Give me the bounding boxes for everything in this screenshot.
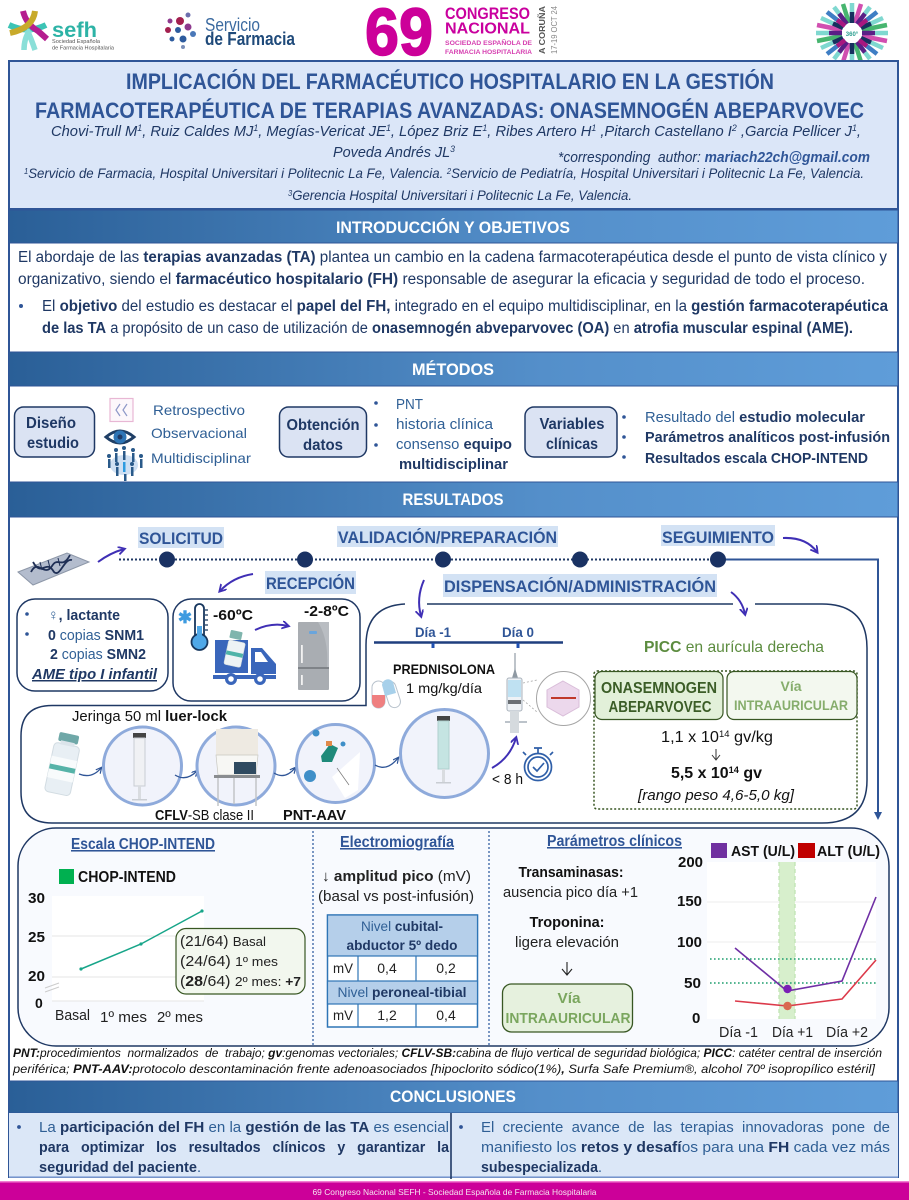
text: conclusión 2: El creciente avance de las terapias innovadoras pone de	[481, 1119, 890, 1136]
icon: vial	[44, 731, 82, 796]
table: amplitud	[328, 915, 478, 1027]
line chart: CHOP-INTEND: 30	[28, 890, 45, 907]
logo: SEFH	[9, 11, 115, 52]
text: conclusión 1: seguridad del paciente.	[39, 1159, 201, 1176]
heading: title	[35, 69, 864, 123]
panel: diseño estudio: Multidisciplinar	[151, 450, 251, 466]
authors: Poveda Andrés JL	[333, 144, 455, 161]
arrow: seguimiento	[783, 538, 817, 552]
affiliations: Servicio de Farmacia, Hospital Universitari i Politecnic La Fe, Valencia.	[28, 165, 447, 181]
authors: 1	[591, 123, 596, 133]
text: PICC: PICC en aurícula derecha	[644, 639, 824, 656]
arrow: recepción	[220, 574, 253, 591]
section header: Métodos	[9, 352, 898, 386]
line chart: CHOP-INTEND: 20	[28, 968, 45, 985]
heading: title: IMPLICACIÓN DEL FARMACÉUTICO HOSPITALARIO EN LA GESTIÓN	[126, 69, 774, 94]
affiliations: 3	[288, 189, 293, 198]
box: onasemnogen: ABEPARVOVEC	[608, 699, 712, 716]
panel: obtención datos: multidisciplinar	[399, 456, 508, 473]
logo: SEFH: Sociedad Española	[52, 39, 101, 45]
arrow: prep 3	[274, 768, 295, 776]
panel: dosis: 14	[719, 729, 730, 739]
label: DISPENSACIÓN/ADMINISTRACIÓN: DISPENSACIÓN/ADMINISTRACIÓN	[444, 577, 716, 596]
text: conclusión 2: subespecializada.	[481, 1159, 602, 1176]
section header: Conclusiones	[9, 1081, 898, 1113]
arrow: menos de 8 h	[492, 738, 516, 768]
footnote: abreviaturas	[12, 1046, 882, 1076]
panel: diseño estudio	[14, 398, 251, 481]
panel: parámetros clínicos: ausencia pico día +1	[503, 884, 638, 901]
label: CFLV-SB: CFLV-SB clase II	[155, 808, 254, 824]
authors: , Ribes Artero H	[487, 123, 591, 140]
table: amplitud: 0,4	[436, 1007, 456, 1023]
administration timeline	[374, 624, 563, 648]
panel: parámetros clínicos	[502, 833, 880, 1041]
panel: variables clínicas: Resultado del estudio molecular	[645, 409, 865, 426]
footnote: abreviaturas: periférica; PNT-AAV: protocolo descontaminación frente adenoasociados [hipoclorito sódico(1%) , Surfa Safe Premium®, alcohol 70º isopropílico estéril]	[12, 1062, 876, 1076]
line chart: transaminasas	[677, 854, 876, 1041]
table: amplitud: Nivel cubital-	[361, 918, 443, 934]
panel: diseño estudio: estudio	[27, 435, 79, 452]
section header: Métodos: MÉTODOS	[412, 360, 494, 379]
administration timeline: Día -1	[415, 624, 451, 640]
panel: parámetros clínicos: Transaminasas:	[518, 864, 624, 881]
icon: stopwatch	[523, 748, 553, 780]
box: vía intraauricular: INTRAAURICULAR	[734, 697, 848, 713]
line chart: CHOP-INTEND: 25	[28, 929, 45, 946]
line chart: CHOP-INTEND: 1º mes	[100, 1009, 147, 1026]
section header: Introducción: INTRODUCCIÓN Y OBJETIVOS	[336, 218, 570, 237]
panel: recepción: -2-8ºC	[304, 603, 349, 620]
panel: recepción: -60ºC	[213, 607, 253, 624]
logo: Servicio de Farmacia: Servicio	[205, 15, 260, 35]
panel: dosis	[594, 671, 857, 809]
callout: puntuaciones: (28/64) 2º mes: +7	[180, 973, 301, 990]
panel: dosis: gv	[739, 765, 762, 782]
panel: variables clínicas: clínicas	[546, 436, 598, 453]
panel: diseño estudio: Observacional	[151, 425, 247, 441]
panel: dosis: [rango peso 4,6-5,0 kg]	[637, 788, 795, 804]
icon: thermometer	[192, 604, 208, 650]
arrow: dispensación izquierda	[419, 580, 424, 616]
icon: DNA slide	[18, 553, 89, 585]
affiliations: Gerencia Hospital Universitari i Politecnic La Fe, Valencia.	[292, 187, 632, 203]
poster: < 8 h	[492, 772, 523, 788]
panel: preparación y administración outline	[21, 604, 867, 823]
icon: virus capsid zoom	[523, 672, 590, 726]
table: amplitud: 0,2	[436, 960, 456, 976]
table: amplitud: Nivel peroneal-tibial	[338, 984, 466, 1000]
panel: dosis: gv/kg	[730, 729, 773, 746]
panel: electromiografía: ↓ amplitud pico (mV)	[322, 868, 471, 885]
icon: people	[107, 446, 143, 481]
line chart: CHOP-INTEND	[28, 890, 204, 1026]
text: conclusión 2	[459, 1119, 890, 1176]
icon: snowflake: ✱	[178, 608, 192, 627]
footer bar	[0, 1181, 909, 1200]
authors: Chovi-Trull M	[51, 123, 139, 140]
timeline	[119, 552, 882, 820]
affiliations: Servicio de Pediatría, Hospital Universitari i Politecnic La Fe, Valencia.	[451, 165, 864, 181]
arrow: prep 2	[175, 771, 197, 778]
logo: 69 Congreso Nacional: NACIONAL	[445, 20, 530, 38]
authors: , López Briz E	[391, 123, 483, 140]
panel: paciente	[17, 599, 168, 691]
section header: Introducción	[9, 210, 898, 243]
step: jeringa cargada	[400, 710, 488, 798]
panel: obtención datos	[280, 396, 512, 473]
legend: AST ALT: ALT (U/L)	[817, 843, 880, 860]
line chart: transaminasas: 150	[677, 893, 702, 910]
panel: recepción	[173, 599, 360, 701]
step: descontaminación PNT-AAV	[296, 724, 374, 802]
line chart: transaminasas: Día +2	[826, 1024, 868, 1041]
logo: Servicio de Farmacia	[165, 12, 296, 49]
authors: 1	[137, 123, 142, 133]
panel: parámetros clínicos: Parámetros clínicos	[547, 833, 682, 850]
icon: eye	[106, 430, 134, 444]
authors: 1	[253, 123, 258, 133]
panel: diseño estudio: Retrospectivo	[153, 402, 245, 418]
text: introducción: El abordaje de las terapias avanzadas (TA) plantea un cambio en la cadena farmacoterapéutica desde el punto de vista clínico y	[18, 249, 887, 266]
text: introducción: de las TA a propósito de un caso de utilización de onasemnogén abveparvovec (OA) en atrofia muscular espinal (AME).	[42, 320, 853, 337]
text: introducción: El objetivo del estudio es destacar el papel del FH, integrado en el equipo multidisciplinar, en la gestión farmacoterapéutica	[42, 298, 888, 315]
authors	[51, 123, 870, 166]
panel: parámetros clínicos: Troponina:	[530, 914, 604, 931]
box: vía intraauricular: Vía	[558, 990, 581, 1007]
section header: Conclusiones: CONCLUSIONES	[390, 1087, 516, 1106]
table: amplitud: abductor 5º dedo	[346, 937, 458, 953]
step: cabina CFLV	[197, 727, 275, 806]
text: Jeringa: Jeringa 50 ml luer-lock	[72, 709, 228, 725]
text: conclusión 2: manifiesto los retos y desafí os para una FH cada vez más	[481, 1139, 890, 1156]
panel: variables clínicas: Parámetros analíticos post-infusión	[645, 429, 890, 446]
panel: diseño estudio: Diseño	[26, 415, 76, 432]
panel: dosis: 1,1 x 10	[661, 729, 716, 746]
line chart: CHOP-INTEND: 0	[35, 995, 43, 1011]
text: prednisolona: 1 mg/kg/día	[406, 680, 482, 696]
label: SEGUIMIENTO: SEGUIMIENTO	[662, 529, 774, 547]
authors: 1	[386, 123, 391, 133]
authors: ,Pitarch Castellano I	[596, 123, 732, 140]
section header: Resultados	[9, 482, 898, 517]
box: vía intraauricular: Vía	[780, 678, 802, 694]
panel: variables clínicas: Resultados escala CHOP-INTEND	[645, 450, 868, 467]
icon: pills	[372, 679, 402, 709]
text: introducción	[18, 249, 888, 337]
icon: truck	[213, 630, 276, 685]
panel: electromiografía: (basal vs post-infusión)	[318, 888, 474, 905]
arrow: prep 4	[375, 758, 398, 767]
panel: obtención datos: datos	[303, 437, 343, 454]
line chart: transaminasas: 100	[677, 934, 702, 951]
logo: radial burst 360	[816, 3, 888, 62]
footnote: abreviaturas: PNT:procedimientos normalizados de trabajo; gv:genomas vectoriales; CFLV-SB:cabina de flujo vertical de seguridad biológica; PICC: catéter central de inserción	[13, 1046, 882, 1060]
authors: ,	[857, 123, 861, 140]
panel: conclusiones	[9, 1113, 898, 1179]
text: prednisolona	[393, 661, 495, 696]
callout: puntuaciones: (21/64) Basal	[180, 933, 266, 950]
authors: , Ruiz Caldes MJ	[142, 123, 254, 140]
logo: SEFH: sefh	[52, 19, 97, 42]
affiliations: 2	[446, 167, 452, 176]
logo: 69 Congreso Nacional: CONGRESO	[445, 4, 530, 23]
text: conclusión 1: La participación del FH en la gestión de las TA es esencial	[39, 1119, 449, 1136]
panel: obtención datos: Obtención	[286, 417, 360, 434]
panel: obtención datos: historia clínica	[396, 416, 494, 433]
line chart: transaminasas: 0	[692, 1010, 700, 1027]
logo: 69 Congreso Nacional: FARMACIA HOSPITALARIA	[445, 49, 532, 56]
box: vía intraauricular	[727, 672, 857, 720]
panel: paciente: AME tipo I infantil	[31, 666, 158, 683]
table: amplitud: mV	[333, 1007, 354, 1023]
panel: CHOP-INTEND	[28, 836, 305, 1026]
arrow: to solicitud	[98, 549, 124, 562]
legend: AST ALT	[711, 843, 880, 860]
text: prednisolona: PREDNISOLONA	[393, 661, 495, 677]
table: amplitud: 0,4	[377, 960, 397, 976]
logo: 69 Congreso Nacional: A CORUÑA	[537, 6, 547, 54]
logo: Servicio de Farmacia: de Farmacia	[205, 29, 296, 49]
text: introducción: organizativo, siendo el farmacéutico hospitalario (FH) responsable de asegurar la eficacia y seguridad de todo el proceso.	[18, 271, 865, 288]
affiliations	[24, 165, 864, 203]
panel: parámetros clínicos: ligera elevación	[515, 934, 619, 951]
icon: syringe	[505, 653, 527, 733]
authors: ,Garcia Pellicer J	[737, 123, 852, 140]
legend: AST ALT: AST (U/L)	[731, 843, 795, 860]
label: PNT-AAV: PNT-AAV	[283, 808, 346, 824]
panel: variables clínicas	[525, 407, 890, 467]
panel: obtención datos: consenso equipo	[396, 436, 512, 453]
line chart: transaminasas: Día -1	[719, 1024, 758, 1041]
panel: electromiografía	[318, 834, 478, 1027]
table: amplitud: 1,2	[377, 1007, 397, 1023]
arrow: a nevera	[255, 625, 288, 630]
panel: paciente: ♀, lactante	[48, 607, 120, 624]
label: SOLICITUD: SOLICITUD	[139, 530, 223, 548]
panel: variables clínicas: Variables	[540, 416, 604, 433]
logo: 69 Congreso Nacional: 17-19 OCT 24	[550, 5, 559, 54]
panel: obtención datos: PNT	[396, 396, 423, 413]
icon: fridge	[298, 622, 329, 690]
logo: radial burst 360: 360°	[846, 32, 859, 38]
logo: 69 Congreso Nacional	[365, 0, 559, 70]
line chart: transaminasas: Día +1	[772, 1024, 813, 1041]
administration timeline: Día 0	[502, 624, 534, 640]
line chart: CHOP-INTEND: 2º mes	[157, 1009, 203, 1026]
panel: paciente: 0 copias SNM1	[48, 627, 144, 644]
panel: title	[9, 61, 898, 209]
panel: CHOP-INTEND: CHOP-INTEND	[78, 869, 176, 886]
panel: resultados clínicos	[18, 828, 889, 1046]
box: onasemnogen: ONASEMNOGEN	[601, 680, 717, 697]
text: conclusión 1: para optimizar los resultados clínicos y garantizar la	[39, 1139, 450, 1156]
panel: dosis: 5,5 x 10	[671, 765, 727, 782]
label: RECEPCIÓN: RECEPCIÓN	[266, 574, 355, 593]
authors: 1	[852, 123, 857, 133]
authors: *corresponding author: mariach22ch@gmail.com	[558, 149, 870, 166]
label: VALIDACIÓN/PREPARACIÓN: VALIDACIÓN/PREPARACIÓN	[338, 528, 557, 547]
box: onasemnogen	[595, 672, 723, 720]
line chart: CHOP-INTEND: Basal	[55, 1007, 90, 1024]
box: vía intraauricular	[502, 984, 632, 1032]
authors: 3	[450, 144, 455, 154]
footer bar: 69 Congreso Nacional SEFH - Sociedad Española de Farmacia Hospitalaria	[312, 1187, 597, 1197]
box: vía intraauricular: INTRAAURICULAR	[506, 1010, 631, 1027]
section header: Resultados: RESULTADOS	[402, 490, 504, 509]
logo: SEFH: de Farmacia Hospitalaria	[52, 46, 115, 52]
affiliations: 1	[24, 167, 28, 176]
table: amplitud: mV	[333, 960, 354, 976]
panel: dosis: 14	[729, 765, 739, 775]
panel: CHOP-INTEND: Escala CHOP-INTEND	[71, 836, 215, 853]
callout: puntuaciones: (24/64) 1º mes	[180, 953, 279, 970]
arrow: dispensación derecha	[731, 592, 745, 614]
line chart: transaminasas: 50	[684, 975, 701, 992]
line chart: transaminasas: 200	[678, 854, 703, 871]
authors: 1	[482, 123, 487, 133]
logo: 69 Congreso Nacional: SOCIEDAD ESPAÑOLA DE	[445, 38, 533, 47]
panel: paciente: 2 copias SMN2	[50, 646, 146, 663]
authors: , Megías-Vericat JE	[258, 123, 387, 140]
arrow: prep 1	[79, 768, 101, 776]
frame	[9, 209, 898, 1177]
callout: puntuaciones	[176, 928, 305, 994]
authors: 2	[731, 123, 737, 133]
text: conclusión 1	[17, 1119, 450, 1176]
panel: electromiografía: Electromiografía	[340, 834, 454, 851]
step: jeringa vacía	[104, 727, 182, 805]
icon: rewind	[110, 398, 133, 422]
